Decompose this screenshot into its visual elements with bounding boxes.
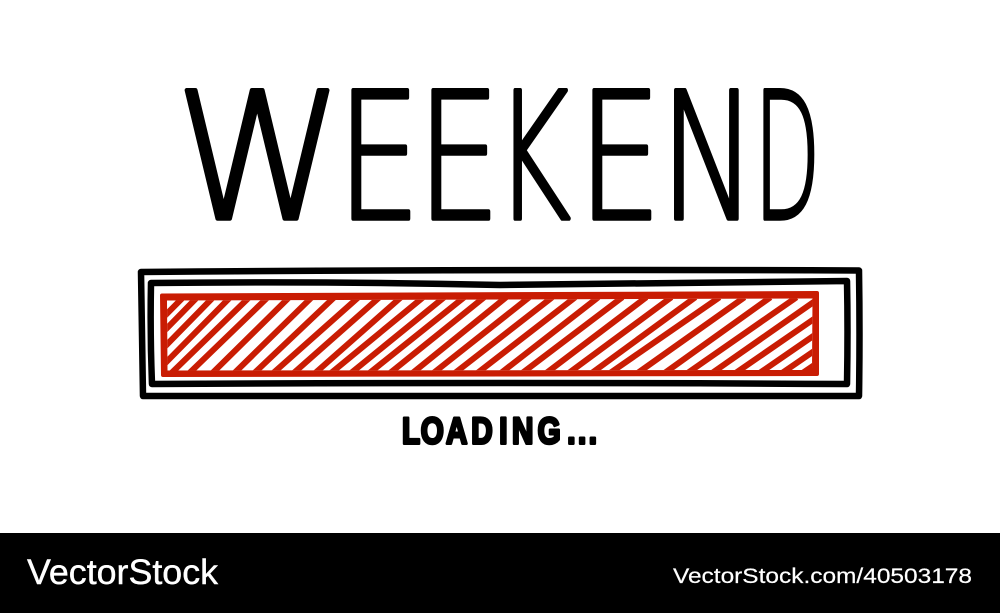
red progress fill [160,291,819,377]
title: WEEKEND: W [175,55,343,260]
title: WEEKEND: E [578,56,661,260]
title: WEEKEND: N [660,57,757,261]
outer sketch frame [141,270,860,396]
title: WEEKEND: E [337,56,420,260]
loading bar [110,270,911,396]
footer brand: VectorStock [27,553,219,592]
footer band [0,533,1000,613]
title: WEEKEND [175,55,820,261]
loading label: LOADING... [402,411,597,452]
inner sketch frame [151,281,847,384]
title: WEEKEND: E [417,56,500,260]
footer image id: VectorStock.com/40503178 [673,564,972,588]
white hatch panel with red stripes [167,298,812,370]
title: WEEKEND: K [495,56,571,261]
title: WEEKEND: D [754,55,820,260]
